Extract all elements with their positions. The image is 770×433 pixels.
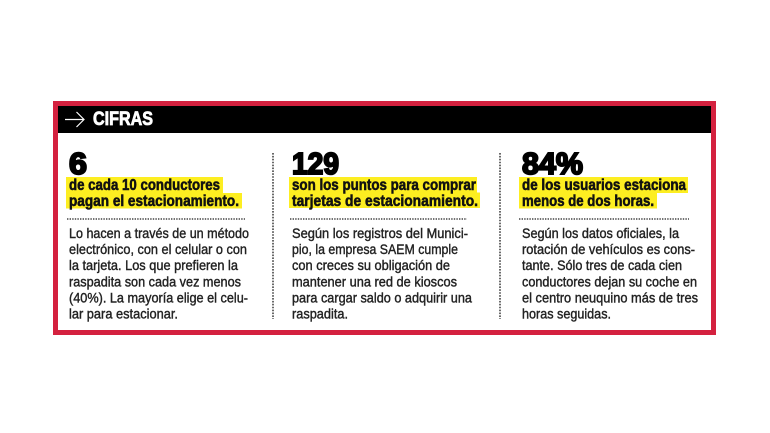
header bar xyxy=(58,106,711,133)
highlighted headline 3 xyxy=(519,177,688,210)
highlighted headline 1: de cada 10 conductores xyxy=(69,177,220,194)
body text 3: conductores dejan su coche en xyxy=(522,274,697,290)
body text 1: la tarjeta. Los que prefieren la xyxy=(69,257,238,273)
body text 3: Según los datos oficiales, la xyxy=(522,225,679,241)
highlighted headline 3: menos de dos horas. xyxy=(522,193,654,210)
highlighted headline 3: de los usuarios estaciona xyxy=(522,177,686,194)
body text 1: lar para estacionar. xyxy=(69,306,178,322)
big number: 6: 6 xyxy=(69,147,87,181)
body text 3: el centro neuquino más de tres xyxy=(522,290,698,306)
highlighted headline 2: son los puntos para comprar xyxy=(292,177,476,194)
panel: red frame xyxy=(56,104,714,332)
body text 2: pio, la empresa SAEM cumple xyxy=(292,241,458,257)
body text 1: electrónico, con el celular o con xyxy=(69,241,247,257)
column 2 xyxy=(289,147,480,322)
column 3 xyxy=(519,147,698,322)
body text 2 xyxy=(292,225,472,322)
big number: 129: 129 xyxy=(292,147,339,181)
big number: 84%: 84% xyxy=(522,147,583,181)
icon: arrow xyxy=(65,112,84,127)
body text 2: mantener una red de kioscos xyxy=(292,274,457,290)
body text 1: raspadita son cada vez menos xyxy=(69,274,241,290)
body text 2: para cargar saldo o adquirir una xyxy=(292,290,472,306)
body text 3 xyxy=(522,225,698,322)
body text 2: raspadita. xyxy=(292,306,348,322)
body text 2: con creces su obligación de xyxy=(292,257,450,273)
body text 3: rotación de vehículos es cons- xyxy=(522,241,695,257)
body text 2: Según los registros del Munici- xyxy=(292,225,468,241)
heading: CIFRAS: CIFRAS xyxy=(93,109,153,130)
highlighted headline 2 xyxy=(289,177,480,210)
body text 3: horas seguidas. xyxy=(522,306,611,322)
body text 1: (40%). La mayoría elige el celu- xyxy=(69,290,248,306)
highlighted headline 1: pagan el estacionamiento. xyxy=(69,193,239,210)
body text 3: tante. Sólo tres de cada cien xyxy=(522,257,682,273)
body text 1: Lo hacen a través de un método xyxy=(69,225,249,241)
body text 1 xyxy=(69,225,249,322)
highlighted headline 1 xyxy=(66,177,242,210)
column 1 xyxy=(66,147,249,322)
highlighted headline 2: tarjetas de estacionamiento. xyxy=(292,193,478,210)
